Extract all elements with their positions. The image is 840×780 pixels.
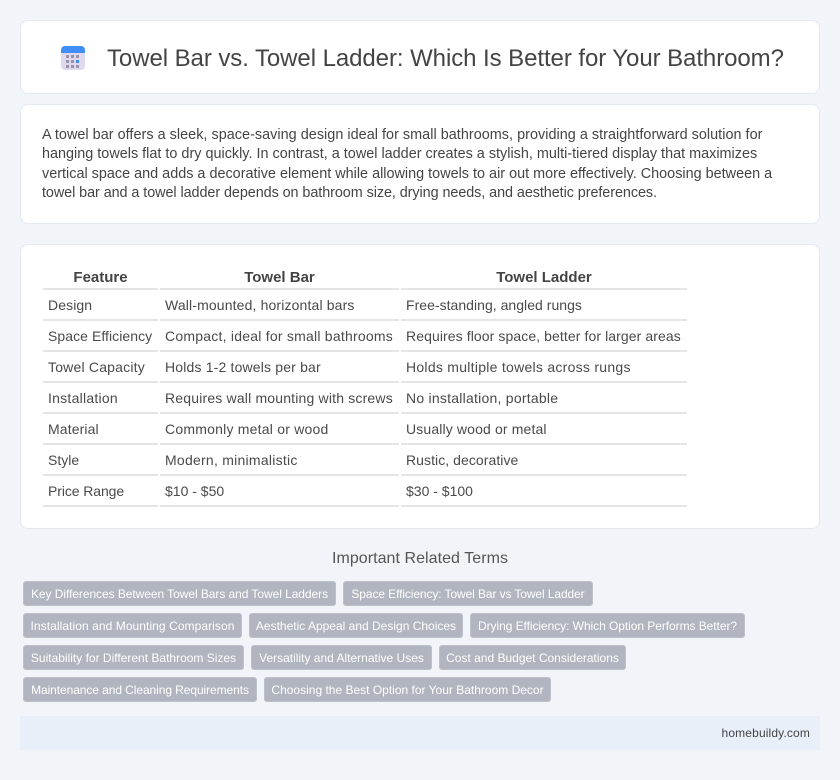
related term tags: Aesthetic Appeal and Design Choices bbox=[256, 619, 456, 633]
row: design bbox=[48, 297, 582, 313]
row: style: Rustic, decorative bbox=[406, 452, 518, 468]
row: towel capacity: Towel Capacity bbox=[48, 359, 145, 375]
row: price range bbox=[48, 483, 473, 499]
table header: Towel Ladder bbox=[496, 269, 592, 286]
related term tags: Key Differences Between Towel Bars and Towel Ladders bbox=[31, 587, 328, 601]
row: towel capacity: Holds multiple towels across rungs bbox=[406, 359, 631, 375]
row: material: Material bbox=[48, 421, 99, 437]
row: material: Commonly metal or wood bbox=[165, 421, 329, 437]
table header: Feature bbox=[73, 269, 128, 286]
intro text: A towel bar offers a sleek, space-saving design ideal for small bathrooms, providing a straightforward solution for bbox=[42, 127, 762, 143]
row: installation: No installation, portable bbox=[406, 390, 558, 406]
intro text: vertical space and adds a decorative element while allowing towels to air out more effectively. Choosing between a bbox=[42, 166, 772, 182]
row: space efficiency: Space Efficiency bbox=[48, 328, 152, 344]
row: installation: Installation bbox=[48, 390, 118, 406]
row: price range: $30 - $100 bbox=[406, 483, 473, 499]
related term tags: Versatility and Alternative Uses bbox=[259, 651, 424, 665]
related term tags: Choosing the Best Option for Your Bathroom Decor bbox=[271, 683, 544, 697]
related term tags: Cost and Budget Considerations bbox=[446, 651, 619, 665]
panel: title card bbox=[20, 20, 820, 94]
footer bbox=[20, 716, 820, 750]
panel: comparison table bbox=[20, 244, 820, 529]
row: price range: Price Range bbox=[48, 483, 124, 499]
row: space efficiency bbox=[48, 328, 681, 344]
row: style: Modern, minimalistic bbox=[165, 452, 298, 468]
intro text: towel bar and a towel ladder depends on bathroom size, drying needs, and aesthetic preferences. bbox=[42, 185, 657, 201]
row: material: Usually wood or metal bbox=[406, 421, 547, 437]
panel: introduction bbox=[20, 104, 820, 224]
related term tags: Space Efficiency: Towel Bar vs Towel Ladder bbox=[351, 587, 585, 601]
table header bbox=[73, 269, 592, 286]
row: towel capacity: Holds 1-2 towels per bar bbox=[165, 359, 321, 375]
row: space efficiency: Requires floor space, better for larger areas bbox=[406, 328, 681, 344]
row: towel capacity bbox=[48, 359, 631, 375]
row: space efficiency: Compact, ideal for small bathrooms bbox=[165, 328, 393, 344]
row: design: Design bbox=[48, 297, 92, 313]
related term tags bbox=[23, 581, 745, 702]
icon: calendar bbox=[61, 46, 85, 70]
row: style bbox=[48, 452, 518, 468]
row: price range: $10 - $50 bbox=[165, 483, 224, 499]
row: design: Free-standing, angled rungs bbox=[406, 297, 582, 313]
row: style: Style bbox=[48, 452, 79, 468]
related term tags: Suitability for Different Bathroom Sizes bbox=[31, 651, 236, 665]
table header: Towel Bar bbox=[244, 269, 315, 286]
heading: related terms: Important Related Terms bbox=[332, 550, 508, 567]
row: material bbox=[48, 421, 547, 437]
row: installation bbox=[48, 390, 558, 406]
intro text: hanging towels flat to dry quickly. In contrast, a towel ladder creates a stylish, multi-tiered display that maximizes bbox=[42, 146, 757, 162]
related term tags: Drying Efficiency: Which Option Performs Better? bbox=[478, 619, 737, 633]
related term tags: Maintenance and Cleaning Requirements bbox=[31, 683, 249, 697]
title: Towel Bar vs. Towel Ladder: Which Is Better for Your Bathroom? bbox=[107, 45, 784, 72]
intro text bbox=[42, 127, 772, 201]
related term tags: Installation and Mounting Comparison bbox=[30, 619, 234, 633]
row: design: Wall-mounted, horizontal bars bbox=[165, 297, 355, 313]
row: installation: Requires wall mounting with screws bbox=[165, 390, 393, 406]
footer brand: homebuildy.com bbox=[722, 726, 810, 740]
